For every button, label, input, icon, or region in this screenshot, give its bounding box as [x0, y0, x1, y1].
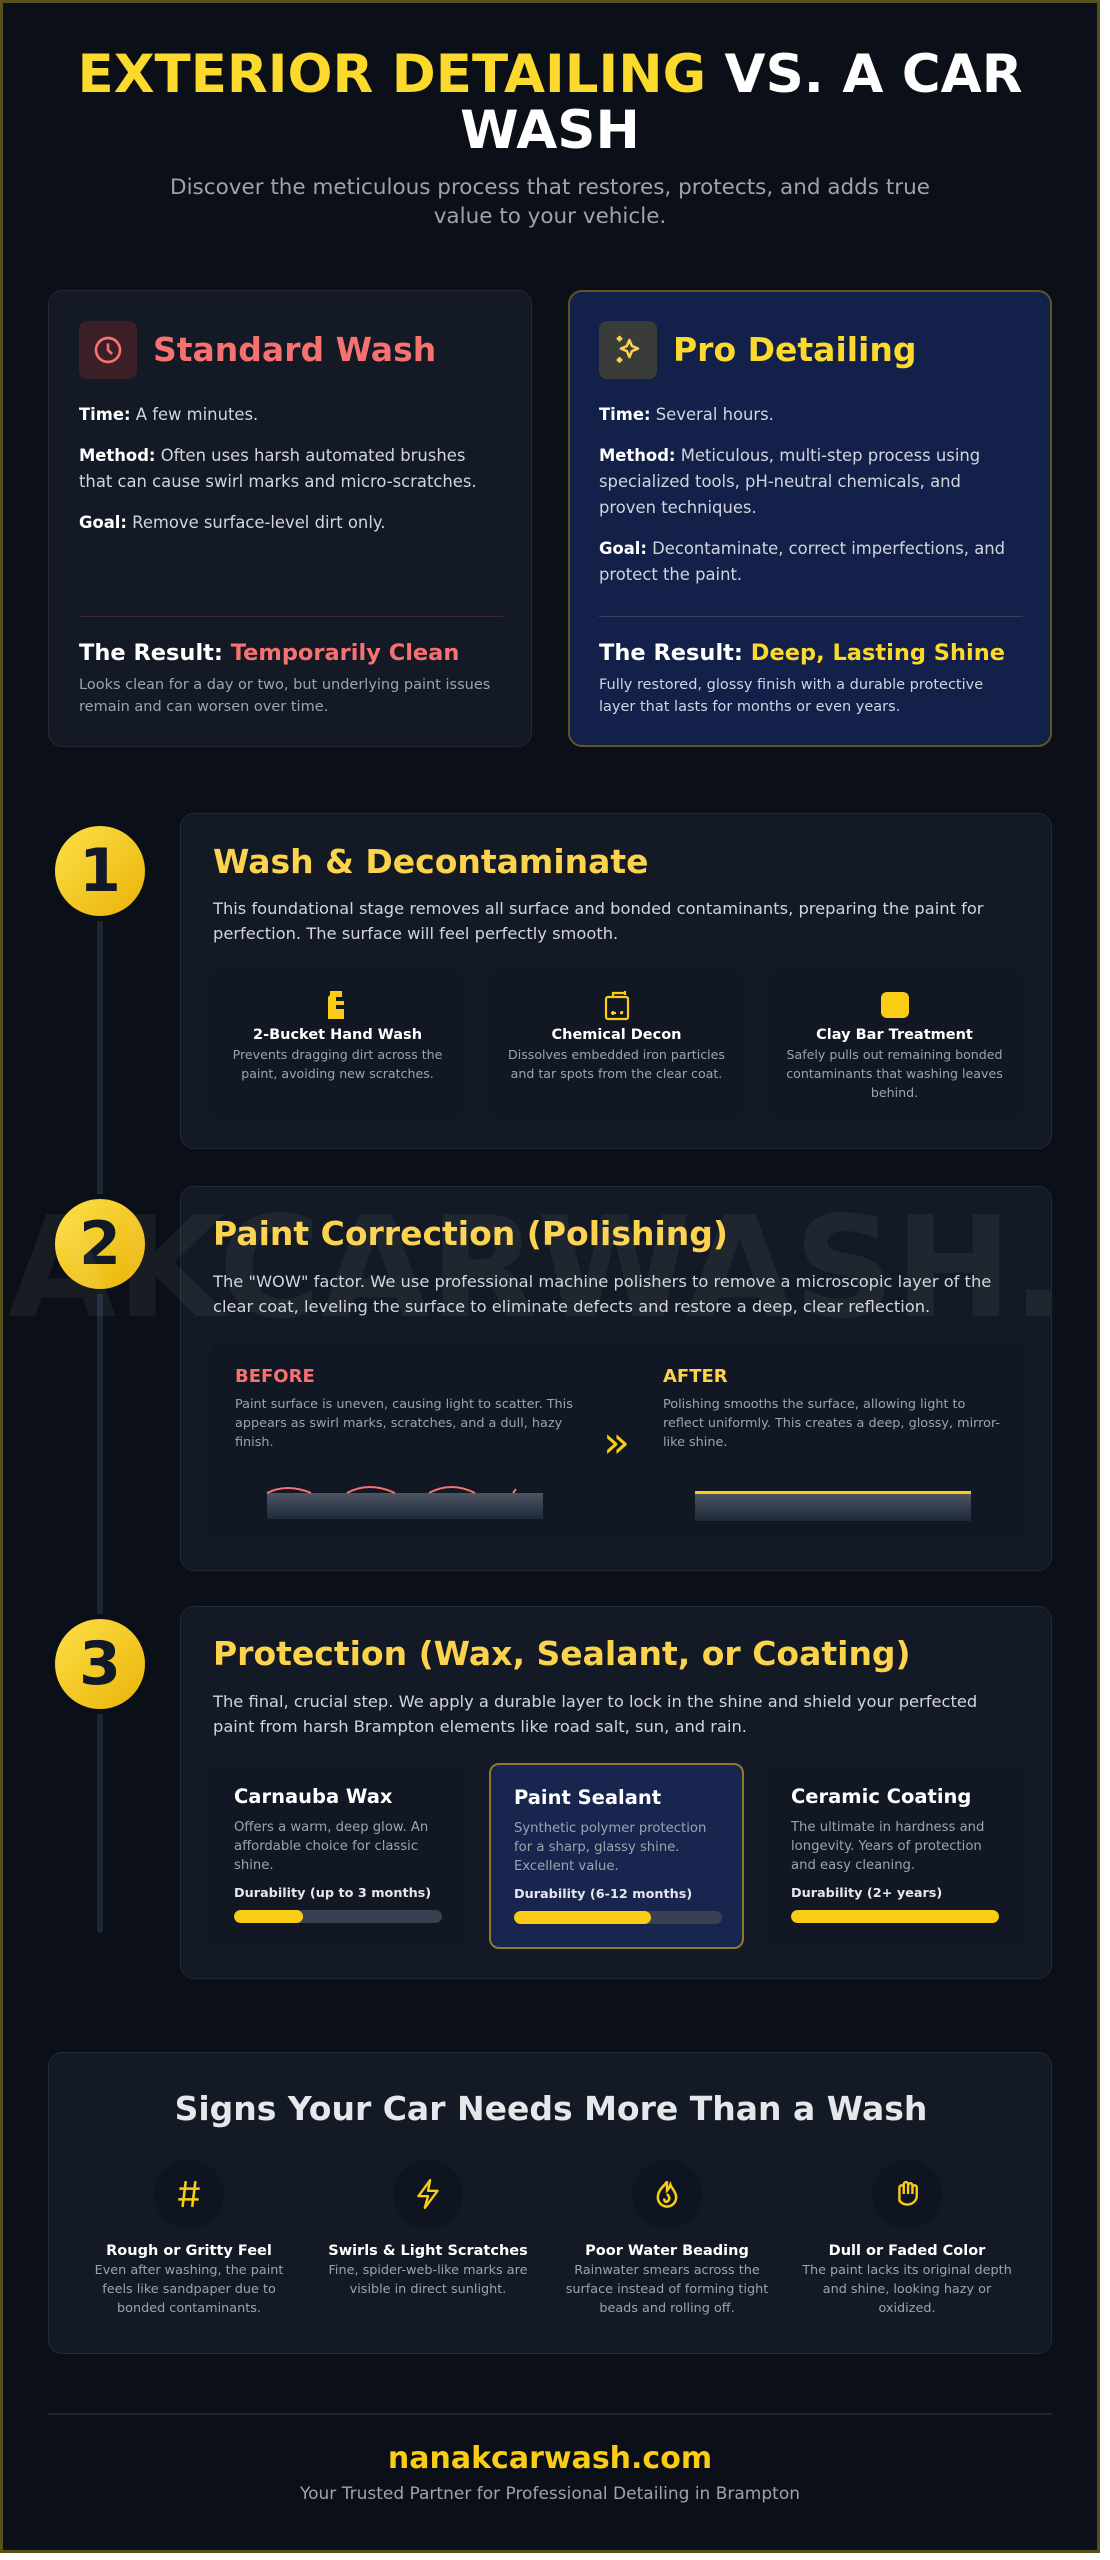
- subtitle: Discover the meticulous process that restores, protects, and adds true value to your vehicle.: [170, 175, 930, 229]
- result: [599, 640, 1005, 715]
- protection: carnauba: [210, 1763, 465, 1949]
- heading: standard wash: Standard Wash: [153, 330, 436, 369]
- sign: water beading: Poor Water Beading: [585, 2243, 749, 2259]
- protection: ceramic: Durability (2+ years): [791, 1886, 942, 1901]
- sub: chemical decon: Dissolves embedded iron particles and tar spots from the clear coat.: [508, 1047, 725, 1081]
- step 1 number: 1: [79, 836, 121, 906]
- protection: sealant: Synthetic polymer protection for a sharp, glassy shine. Excellent value.: [514, 1821, 706, 1874]
- sign: swirls: [328, 2179, 528, 2297]
- sub: chemical decon: Chemical Decon: [551, 1027, 682, 1043]
- after: [663, 1366, 1000, 1450]
- sign: dull: [802, 2180, 1012, 2316]
- step 3 number: [52, 1616, 148, 1712]
- footer: nanakcarwash.com: [388, 2441, 712, 2476]
- sub: clay bar: Clay Bar Treatment: [816, 1027, 973, 1043]
- before: BEFORE: [235, 1366, 315, 1387]
- panel: step 2: [180, 1186, 1052, 1571]
- icon: clay: [881, 992, 909, 1018]
- sub: clay bar: [767, 969, 1022, 1119]
- sign: water beading: Rainwater smears across the surface instead of forming tight beads and rolling off.: [566, 2263, 768, 2316]
- sign: rough: [95, 2181, 284, 2316]
- heading: pro detailing: Pro Detailing: [673, 330, 916, 369]
- after: Polishing smooths the surface, allowing light to reflect uniformly. This creates a deep, glossy, mirror-like shine.: [663, 1397, 1000, 1450]
- footer: [300, 2441, 800, 2504]
- text block: [599, 405, 1005, 584]
- signs heading: Signs Your Car Needs More Than a Wash: [175, 2089, 927, 2128]
- title: EXTERIOR DETAILING VS. A CAR: [77, 44, 1023, 105]
- protection: ceramic: Ceramic Coating: [791, 1785, 971, 1808]
- text block: Goal: Decontaminate, correct imperfections, and protect the paint.: [599, 539, 1005, 584]
- text block: Time: Several hours.: [599, 405, 774, 424]
- panel: pro detailing: [568, 290, 1052, 747]
- icon: sparkles: [599, 321, 657, 379]
- step 3 number: 3: [79, 1629, 121, 1699]
- protection: carnauba: Carnauba Wax: [234, 1785, 392, 1808]
- result: Fully restored, glossy finish with a durable protective layer that lasts for months or even years.: [599, 677, 983, 715]
- timeline line: [97, 873, 103, 1933]
- protection: sealant: Durability (6-12 months): [514, 1887, 692, 1902]
- protection: sealant: Paint Sealant: [514, 1786, 661, 1809]
- step 3 heading: Protection (Wax, Sealant, or Coating): [213, 1634, 911, 1673]
- before/after box: [210, 1341, 1024, 1541]
- result: The Result: Temporarily Clean: [79, 640, 459, 666]
- sub: chemical decon: [489, 969, 744, 1119]
- text block: Method: Often uses harsh automated brushes that can cause swirl marks and micro-scratches.: [79, 446, 477, 491]
- sign: rough: Rough or Gritty Feel: [106, 2243, 272, 2259]
- step 2 description: The "WOW" factor. We use professional machine polishers to remove a microscopic layer of the clear coat, leveling the surface to eliminate defects and restore a deep, clear reflection.: [213, 1272, 991, 1316]
- panel: signs: [48, 2052, 1052, 2354]
- sign: dull: Dull or Faded Color: [829, 2243, 985, 2259]
- protection: carnauba: Offers a warm, deep glow. An affordable choice for classic shine.: [234, 1820, 428, 1873]
- text block: [79, 405, 477, 532]
- footer: Your Trusted Partner for Professional Detailing in Brampton: [300, 2484, 800, 2504]
- result: [79, 640, 490, 715]
- step 2 number: [52, 1196, 148, 1292]
- sign: dull: The paint lacks its original depth and shine, looking hazy or oxidized.: [802, 2263, 1012, 2316]
- protection: carnauba: Durability (up to 3 months): [234, 1886, 431, 1901]
- protection: ceramic: [767, 1763, 1022, 1949]
- text block: Goal: Remove surface-level dirt only.: [79, 513, 385, 532]
- protection: ceramic: The ultimate in hardness and longevity. Years of protection and easy cleaning.: [791, 1820, 984, 1873]
- step 2 heading: Paint Correction (Polishing): [213, 1214, 728, 1253]
- icon: bucket: [328, 991, 344, 1019]
- sign: swirls: Fine, spider-web-like marks are visible in direct sunlight.: [328, 2263, 528, 2297]
- panel: standard wash: [48, 290, 532, 747]
- step 1 description: This foundational stage removes all surface and bonded contaminants, preparing the paint for perfection. The surface will feel perfectly smooth.: [213, 899, 983, 943]
- sign: water beading: [566, 2180, 768, 2316]
- step 2 number: 2: [79, 1209, 121, 1279]
- before: Paint surface is uneven, causing light to scatter. This appears as swirl marks, scratches, and a dull, hazy finish.: [235, 1397, 573, 1450]
- panel: step 3: [180, 1606, 1052, 1979]
- icon: clock: [79, 321, 137, 379]
- sub: clay bar: Safely pulls out remaining bonded contaminants that washing leaves behind.: [786, 1047, 1003, 1100]
- protection: sealant: [489, 1763, 744, 1949]
- after graphic: [695, 1491, 971, 1521]
- arrow: »: [603, 1417, 630, 1468]
- text block: Method: Meticulous, multi-step process using specialized tools, pH-neutral chemicals, and proven techniques.: [599, 446, 980, 517]
- step 1 number: [52, 823, 148, 919]
- sign: swirls: Swirls & Light Scratches: [328, 2243, 528, 2259]
- before graphic: [266, 1486, 543, 1519]
- title: WASH: [460, 100, 640, 161]
- sign: rough: Even after washing, the paint feels like sandpaper due to bonded contaminants.: [95, 2263, 283, 2316]
- panel: step 1: [180, 813, 1052, 1149]
- sub: 2-bucket: [210, 969, 465, 1119]
- icon: spray: [604, 991, 630, 1020]
- sub: 2-bucket: Prevents dragging dirt across the paint, avoiding new scratches.: [233, 1047, 442, 1081]
- step 1 heading: Wash & Decontaminate: [213, 842, 649, 881]
- title: [77, 44, 1023, 161]
- text block: Time: A few minutes.: [79, 405, 258, 424]
- result: The Result: Deep, Lasting Shine: [599, 640, 1005, 666]
- sub: 2-bucket: 2-Bucket Hand Wash: [253, 1027, 422, 1043]
- before: [235, 1366, 573, 1450]
- result: Looks clean for a day or two, but underlying paint issues remain and can worsen over time.: [79, 677, 490, 715]
- step 3 description: The final, crucial step. We apply a durable layer to lock in the shine and shield your perfected paint from harsh Brampton elements like road salt, sun, and rain.: [213, 1692, 977, 1736]
- after: AFTER: [663, 1366, 728, 1387]
